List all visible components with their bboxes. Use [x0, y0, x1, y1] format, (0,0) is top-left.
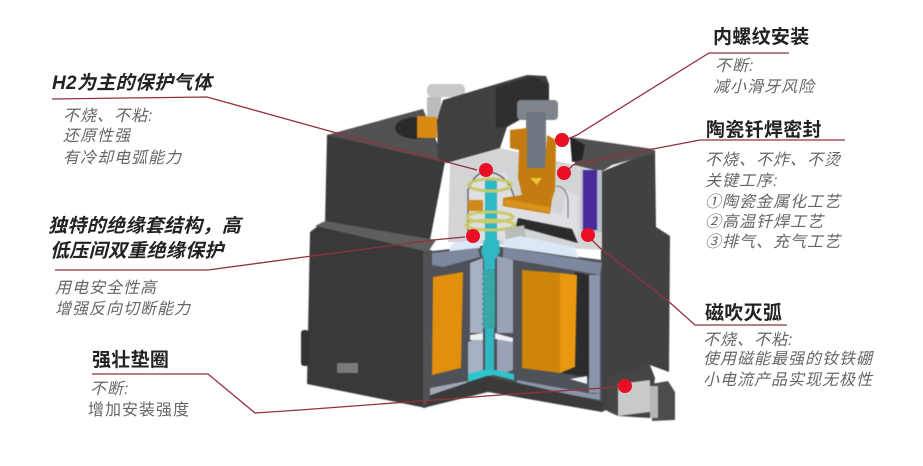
callout: H2 gas text: 还原性强: [63, 127, 132, 145]
callout: internal thread text: 内螺纹安装: [713, 25, 810, 48]
callout: washer leader: [92, 374, 632, 413]
left terminal screw: [417, 84, 465, 138]
callout: magnetic arc text: 磁吹灭弧: [705, 301, 782, 324]
white washers in core: [470, 333, 513, 342]
callout: ceramic seal text: 不烧、不炸、不烫: [705, 151, 842, 169]
section background: [423, 245, 602, 412]
callout: washer text: 增加安装强度: [88, 401, 190, 419]
dark coil cavity: [562, 272, 589, 378]
callout: ceramic seal text: ②高温钎焊工艺: [705, 213, 825, 231]
callout: ceramic seal text: ③排气、充气工艺: [705, 233, 842, 251]
dark terminal partition: [437, 75, 549, 163]
mounting foot with washer: [618, 380, 675, 421]
callout: ceramic seal text: ①陶瓷金属化工艺: [705, 193, 842, 211]
callout: insulation text: 低压间双重绝缘保护: [50, 240, 226, 262]
left orange coil: [432, 272, 463, 375]
callout: magnetic arc text: 不烧、不粘:: [703, 331, 793, 349]
callout: magnetic arc text: [703, 301, 874, 389]
bottom housing cut edge: [423, 376, 602, 412]
callout: ceramic seal text: 陶瓷钎焊密封: [706, 118, 822, 141]
callout: H2 gas text: 有冷却电弧能力: [63, 149, 183, 167]
callout: internal thread text: [713, 25, 816, 96]
right orange coil: [522, 270, 577, 373]
callout: H2 gas text: 不烧、不粘:: [63, 107, 153, 125]
cutaway chamber wall: [448, 148, 602, 250]
central chamber spring and coils: [466, 179, 526, 250]
left housing block: [301, 109, 445, 408]
callout: ceramic seal text: 关键工序:: [705, 172, 778, 190]
inner chamber: [468, 172, 578, 243]
callout: washer text: 不断:: [90, 380, 129, 398]
cyan plunger shaft: [468, 240, 514, 382]
callout: washer text: 强壮垫圈: [92, 349, 169, 371]
white washer in coil cavity: [570, 376, 587, 384]
callout: magnetic arc text: 使用磁能最强的钕铁硼: [703, 350, 874, 368]
purple magnet: [581, 170, 602, 232]
callout: insulation text: [48, 215, 244, 318]
central core tube: [468, 256, 513, 378]
grey centre screw: [517, 100, 558, 172]
callout: insulation text: 增强反向切断能力: [55, 300, 192, 318]
callout: internal thread text: 减小滑牙风险: [713, 78, 816, 96]
callout: internal thread text: 不断:: [715, 57, 754, 75]
orange contact terminal: [503, 128, 556, 214]
yoke plates: [430, 247, 602, 400]
callout: H2 gas leader: [52, 97, 493, 177]
callout: insulation leader: [55, 229, 480, 270]
left section wall: [423, 250, 432, 408]
callout: magnetic arc text: 小电流产品实现无极性: [703, 371, 874, 389]
callout: insulation text: 独特的绝缘套结构，高: [48, 215, 244, 237]
light blue cavity: [448, 236, 579, 258]
callout: internal thread leader: [555, 53, 789, 147]
callout: insulation text: 用电安全性高: [55, 279, 158, 297]
right housing block: [570, 137, 670, 418]
callout: washer text: [88, 349, 190, 419]
callout: magnetic arc leader: [581, 228, 787, 325]
callout: H2 gas text: [52, 72, 215, 167]
callout: ceramic seal text: [705, 118, 842, 251]
callout: H2 gas text: H2为主的保护气体: [52, 72, 215, 94]
relay cutaway illustration: [301, 75, 675, 421]
callout: ceramic seal leader: [557, 140, 845, 180]
